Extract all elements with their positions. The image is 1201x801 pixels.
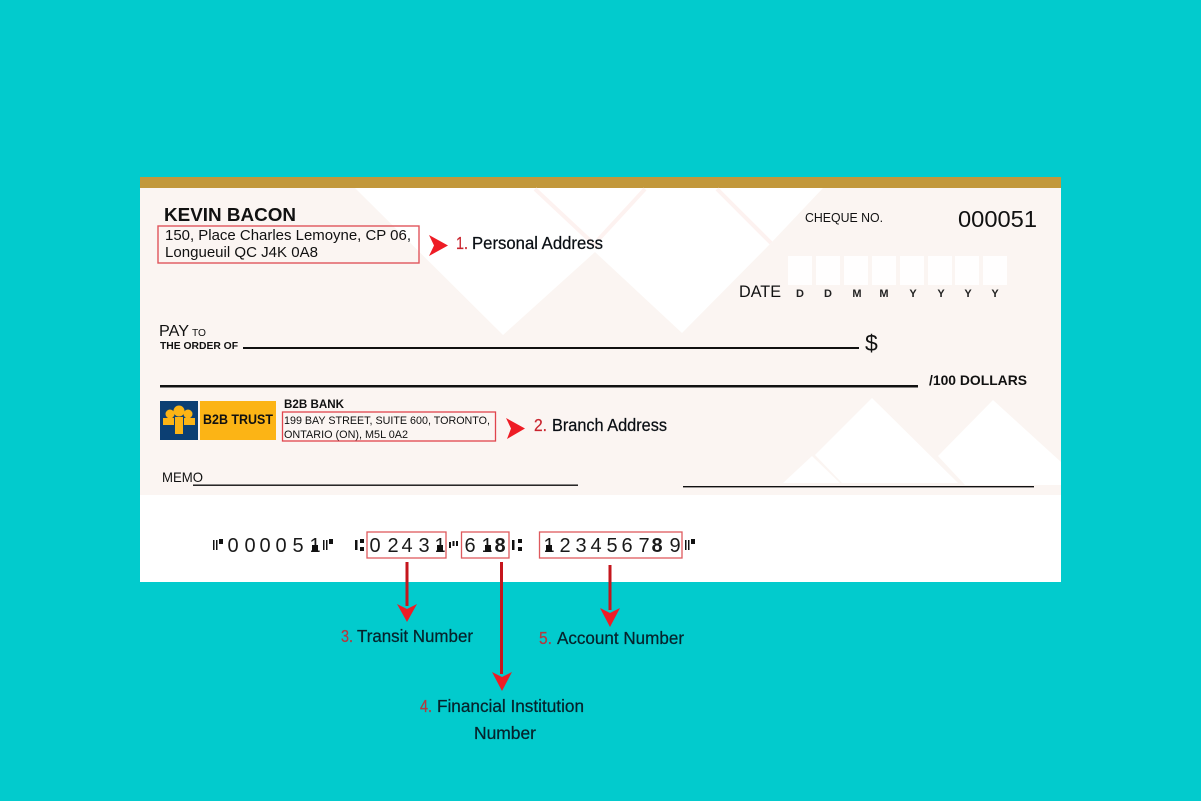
MICR serial number: 0 xyxy=(275,535,287,557)
label: branch address: 2. xyxy=(534,415,547,435)
signature line xyxy=(683,486,1034,487)
label: account number: 5. xyxy=(539,628,552,648)
label: transit number: 3. xyxy=(341,626,353,646)
institution number highlight box: 8 xyxy=(494,535,506,557)
MICR serial number xyxy=(213,535,333,557)
cheque number: 000051 xyxy=(958,206,1037,232)
date format letters: Y xyxy=(937,288,945,300)
transit number highlight box: 0 xyxy=(369,535,381,557)
date boxes xyxy=(788,256,1007,285)
MICR separator symbol xyxy=(449,541,458,548)
date format letters: Y xyxy=(909,288,917,300)
arrow: personal address xyxy=(429,235,448,256)
personal address highlight box: Longueuil QC J4K 0A8 xyxy=(165,244,318,261)
arrow: account number xyxy=(600,565,620,627)
MICR serial number: 1 xyxy=(309,535,321,557)
MICR institution symbol xyxy=(512,539,522,551)
white diamond background pattern xyxy=(355,188,1061,485)
date format letters: Y xyxy=(991,288,999,300)
label: account number: Account Number xyxy=(557,628,684,648)
date label: DATE xyxy=(739,283,781,301)
date format letters: Y xyxy=(964,288,972,300)
personal address highlight box: 150, Place Charles Lemoyne, CP 06, xyxy=(165,227,411,244)
gold top band xyxy=(140,177,1061,188)
arrow: financial institution number xyxy=(492,562,512,691)
MICR serial number: 0 xyxy=(244,535,256,557)
account number highlight box: 4 xyxy=(590,535,602,557)
bank name: B2B BANK xyxy=(284,399,345,411)
pay to the order of label xyxy=(159,323,238,352)
account number highlight box: 8 xyxy=(651,535,663,557)
label: financial institution number xyxy=(420,696,584,743)
branch address highlight box xyxy=(282,412,496,441)
MICR transit symbol xyxy=(355,539,364,551)
MICR closing symbol xyxy=(685,539,695,550)
transit number highlight box xyxy=(367,532,446,558)
label: financial institution number: Financial Institution xyxy=(437,696,584,716)
dollar sign: $ xyxy=(865,330,878,356)
label: financial institution number: Number xyxy=(474,723,536,743)
institution number highlight box: 6 xyxy=(464,535,476,557)
account number highlight box: 2 xyxy=(559,535,571,557)
date format letters: D xyxy=(824,288,832,300)
date format letters xyxy=(796,288,999,300)
MICR serial number: 5 xyxy=(292,535,304,557)
account number highlight box: 5 xyxy=(606,535,618,557)
transit number highlight box: 2 xyxy=(387,535,399,557)
account number highlight box: 9 xyxy=(669,535,681,557)
pay to the order of label: TO xyxy=(192,328,206,339)
label: transit number: Transit Number xyxy=(357,626,473,646)
account holder name: KEVIN BACON xyxy=(164,204,296,225)
account number highlight box: 3 xyxy=(575,535,587,557)
label: branch address: Branch Address xyxy=(552,415,667,435)
cheque white footer band xyxy=(140,495,1061,582)
dollars label: /100 DOLLARS xyxy=(929,372,1027,388)
bank logo: B2B TRUST xyxy=(203,411,273,427)
date format letters: D xyxy=(796,288,804,300)
MICR serial number: 0 xyxy=(259,535,271,557)
arrow: branch address xyxy=(506,418,525,439)
label: financial institution number: 4. xyxy=(420,696,432,716)
transit number highlight box: 1 xyxy=(434,535,446,557)
MICR serial number: 0 xyxy=(227,535,239,557)
amount line xyxy=(160,385,918,388)
account number highlight box: 6 xyxy=(621,535,633,557)
bank logo xyxy=(160,401,276,440)
cheque number label: CHEQUE NO. xyxy=(805,211,883,225)
date format letters: M xyxy=(879,288,889,300)
memo label: MEMO xyxy=(162,469,203,485)
panel: cheque xyxy=(140,177,1061,582)
date format letters: M xyxy=(852,288,862,300)
branch address highlight box: ONTARIO (ON), M5L 0A2 xyxy=(284,429,408,441)
cheque cream body xyxy=(140,188,1061,495)
label: personal address: 1. xyxy=(456,233,468,253)
transit number highlight box: 3 xyxy=(418,535,430,557)
transit number highlight box: 4 xyxy=(401,535,413,557)
pay to the order of label: PAY xyxy=(159,323,189,340)
institution number highlight box: 1 xyxy=(481,535,493,557)
pay to the order of label: THE ORDER OF xyxy=(160,341,238,352)
personal address highlight box xyxy=(158,226,419,263)
memo line xyxy=(193,484,578,486)
account number highlight box: 1 xyxy=(543,535,555,557)
payee line xyxy=(243,347,859,349)
institution number highlight box xyxy=(462,532,509,558)
arrow: transit number xyxy=(397,562,417,622)
label: personal address: Personal Address xyxy=(472,233,603,253)
branch address highlight box: 199 BAY STREET, SUITE 600, TORONTO, xyxy=(284,415,490,427)
account number highlight box: 7 xyxy=(638,535,650,557)
account number highlight box xyxy=(540,532,682,558)
